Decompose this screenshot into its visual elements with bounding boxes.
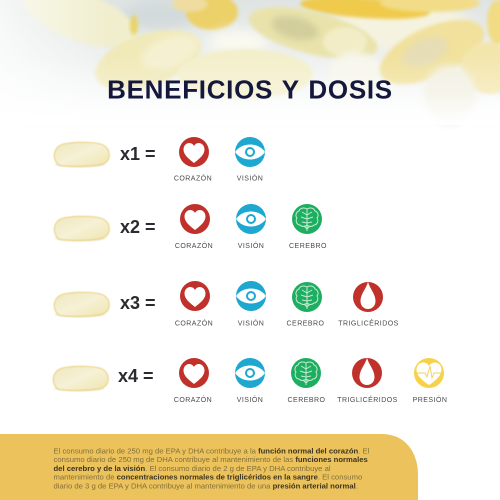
capsule icon x3 xyxy=(54,292,109,318)
capsule icon x1 xyxy=(54,142,109,168)
title: BENEFICIOS Y DOSIS xyxy=(107,74,393,104)
benefit: visión xyxy=(236,281,266,328)
benefit: presión xyxy=(413,358,447,404)
benefit: cerebro: CEREBRO xyxy=(287,320,325,328)
benefit: corazón: CORAZÓN xyxy=(174,174,212,182)
row: 1 capsule xyxy=(54,137,265,182)
benefit: corazón: CORAZÓN xyxy=(174,395,212,404)
panel: legal note xyxy=(0,434,418,500)
note text: El consumo diario de 250 mg de EPA y DHA contribuye a la función normal del corazón. El xyxy=(54,446,369,456)
row: 2 capsules xyxy=(54,204,327,250)
benefit: corazón xyxy=(174,358,212,404)
dose label x4: x4 = xyxy=(118,366,154,386)
benefit: triglicéridos: TRIGLICÉRIDOS xyxy=(337,395,398,404)
benefit: corazón: CORAZÓN xyxy=(175,241,213,250)
benefit: triglicéridos xyxy=(338,282,399,328)
dose label x2: x2 = xyxy=(120,217,156,237)
benefit: visión: VISIÓN xyxy=(237,395,263,404)
benefit: visión: VISIÓN xyxy=(238,241,264,250)
benefit: presión: PRESIÓN xyxy=(413,395,447,404)
dose label x3: x3 = xyxy=(120,293,156,313)
benefit: triglicéridos: TRIGLICÉRIDOS xyxy=(338,318,399,328)
capsule icon x2 xyxy=(54,216,109,242)
benefit: visión: VISIÓN xyxy=(237,174,263,182)
benefit: triglicéridos xyxy=(337,358,398,404)
note text: mantenimiento de concentraciones normales de triglicéridos en la sangre. El consumo xyxy=(54,473,362,482)
dose label x1: x1 = xyxy=(120,144,156,164)
benefit: visión xyxy=(235,358,265,404)
note text: diario de 3 g de EPA y DHA contribuye al mantenimiento de una presión arterial normal. xyxy=(54,481,358,490)
benefit: visión xyxy=(235,137,265,182)
row: 3 capsules xyxy=(54,281,399,328)
benefit: visión: VISIÓN xyxy=(238,318,264,328)
note text: consumo diario de 250 mg de DHA contribuye al mantenimiento de las funciones normales xyxy=(54,455,368,464)
benefit: corazón: CORAZÓN xyxy=(175,318,213,328)
benefit: visión xyxy=(236,204,266,250)
benefit: cerebro xyxy=(287,282,325,328)
benefit: corazón xyxy=(175,204,213,250)
benefit: cerebro: CEREBRO xyxy=(289,243,327,250)
row: 4 capsules xyxy=(53,358,447,404)
capsule icon x4 xyxy=(53,366,108,392)
benefit: cerebro: CEREBRO xyxy=(288,397,326,404)
benefit: cerebro xyxy=(288,358,326,404)
benefit: corazón xyxy=(174,137,212,182)
note text: del cerebro y de la visión. El consumo diario de 2 g de EPA y DHA contribuye al xyxy=(54,464,331,473)
benefit: cerebro xyxy=(289,204,327,250)
benefit: corazón xyxy=(175,281,213,328)
photo header: fish oil capsules xyxy=(0,0,500,130)
